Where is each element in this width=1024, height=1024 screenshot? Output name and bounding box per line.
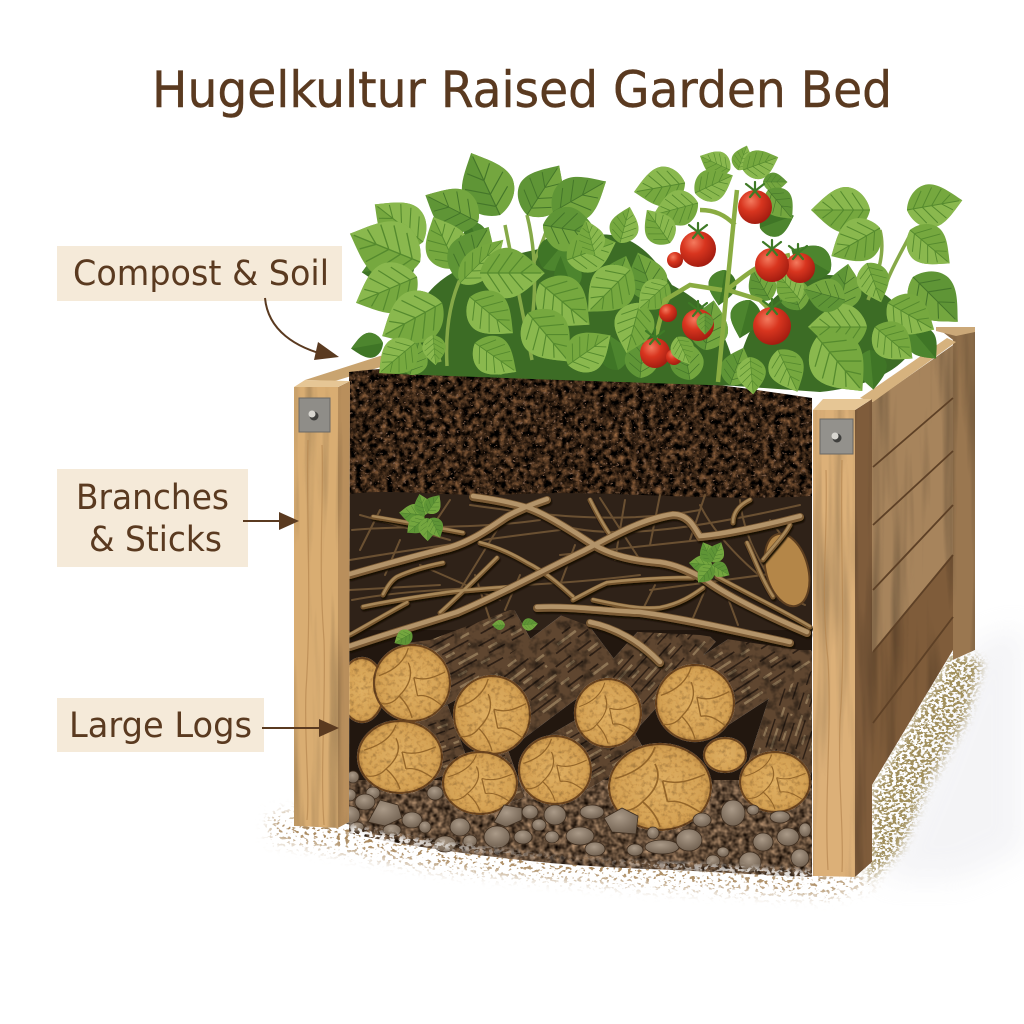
- tomato plant leaves: [630, 142, 803, 252]
- thick sticks: [350, 496, 810, 663]
- foliage backing: [395, 234, 738, 386]
- front right post: [813, 399, 872, 877]
- soil wood chips: [349, 366, 812, 498]
- metal bracket: [299, 398, 330, 432]
- label: large logs: Large Logs: [69, 706, 252, 746]
- metal bracket: [820, 419, 853, 454]
- branches background: [349, 492, 812, 660]
- green sprouts among branches: [391, 490, 733, 650]
- scattered soil on ground below bed: [270, 815, 880, 895]
- back rim left: [305, 338, 445, 381]
- potato leaves: [339, 142, 678, 388]
- gravel stones: [340, 771, 811, 872]
- mid-tone filler leaves: [396, 246, 866, 390]
- label: branches and sticks: [57, 469, 248, 567]
- foliage backing right: [735, 275, 915, 392]
- label: compost and soil: [57, 246, 342, 301]
- post top cap: [813, 399, 872, 410]
- plants: [339, 142, 975, 409]
- label: branches and sticks: & Sticks: [89, 520, 222, 560]
- arrow: logs: [262, 719, 339, 737]
- logs background: [349, 630, 812, 805]
- crumbled gravel edge: [349, 825, 812, 880]
- gravel base: [349, 780, 812, 877]
- thin twigs: [350, 495, 805, 625]
- dark background leaves: [349, 203, 947, 391]
- back corner post: [936, 327, 975, 660]
- label: branches and sticks: Branches: [76, 478, 229, 518]
- arrow: branches: [243, 512, 299, 530]
- cut log end behind sticks: [757, 529, 817, 611]
- ground shadow: [880, 625, 1024, 880]
- cross-section interior: [349, 366, 812, 877]
- stems: [405, 212, 910, 366]
- post top cap: [294, 380, 350, 387]
- right side wall of boards: [860, 338, 956, 785]
- title: Hugelkultur Raised Garden Bed: [152, 61, 892, 119]
- branches and sticks layer: [350, 495, 817, 663]
- arrow: compost and soil: [265, 298, 339, 360]
- front left post: [294, 380, 350, 828]
- label: large logs: [57, 698, 264, 752]
- scattered wood chips right of bed: [868, 650, 982, 882]
- label: compost and soil: Compost & Soil: [73, 254, 329, 294]
- tomatoes: [640, 182, 815, 369]
- tomato stem: [655, 190, 790, 382]
- right plant leaves: [735, 179, 975, 409]
- large logs: [349, 610, 812, 832]
- soil layer: [349, 366, 812, 501]
